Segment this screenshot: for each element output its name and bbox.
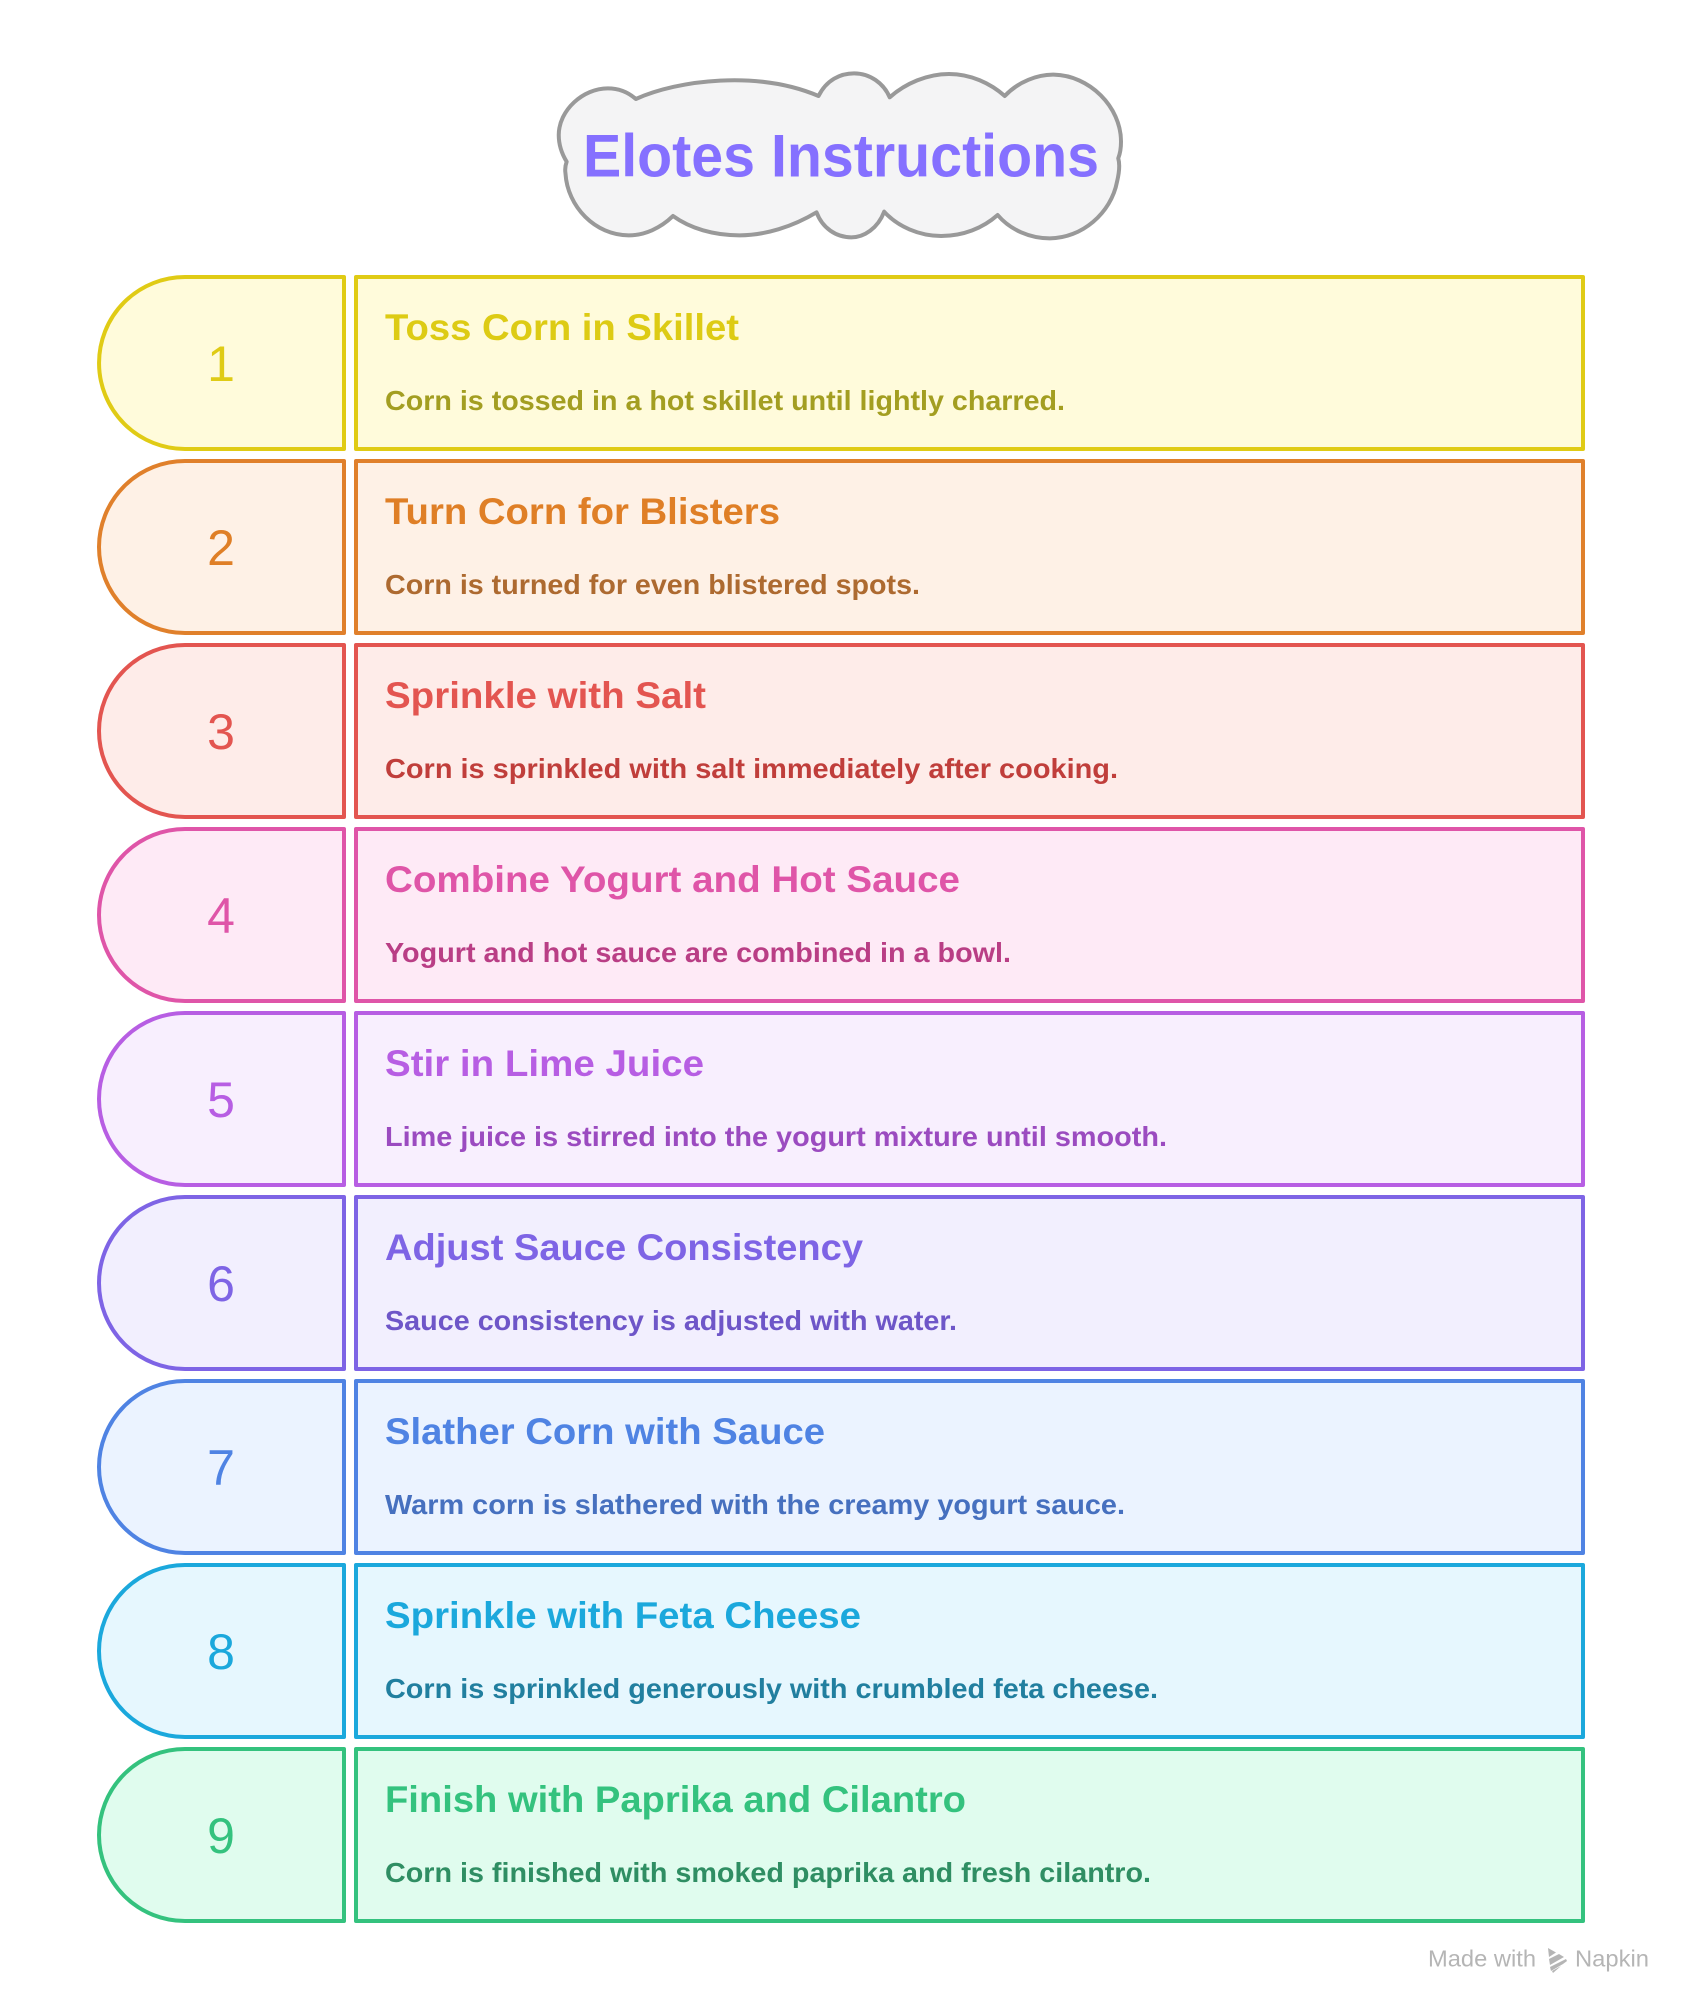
panel: step 7: Slather Corn with Sauce bbox=[385, 1411, 825, 1452]
step 4 bbox=[99, 829, 1583, 1001]
number badge 7: 7 bbox=[207, 1440, 235, 1496]
panel: step 7 bbox=[356, 1381, 1583, 1553]
cloud shape bbox=[559, 73, 1121, 238]
step 8 bbox=[99, 1565, 1583, 1737]
number badge 7 bbox=[99, 1381, 344, 1553]
step 9 bbox=[99, 1749, 1583, 1921]
number badge 9 bbox=[99, 1749, 344, 1921]
number badge 3 bbox=[99, 645, 344, 817]
step 5 bbox=[99, 1013, 1583, 1185]
panel: step 5: Stir in Lime Juice bbox=[385, 1043, 704, 1084]
icon: napkin logo bbox=[1548, 1948, 1567, 1973]
footer attribution: Made with bbox=[1428, 1946, 1536, 1972]
panel: step 8: Corn is sprinkled generously with crumbled feta cheese. bbox=[385, 1673, 1158, 1704]
number badge 1 bbox=[99, 277, 344, 449]
panel: step 2: Turn Corn for Blisters bbox=[385, 491, 780, 532]
number badge 1: 1 bbox=[207, 336, 235, 392]
number badge 2 bbox=[99, 461, 344, 633]
number badge 5 bbox=[99, 1013, 344, 1185]
footer attribution: Napkin bbox=[1575, 1946, 1649, 1972]
panel: step 9: Finish with Paprika and Cilantro bbox=[385, 1779, 966, 1820]
panel: step 1 bbox=[356, 277, 1583, 449]
panel: step 4: Yogurt and hot sauce are combined in a bowl. bbox=[385, 937, 1011, 968]
number badge 5: 5 bbox=[207, 1072, 235, 1128]
panel: step 6: Sauce consistency is adjusted with water. bbox=[385, 1305, 957, 1336]
step 3 bbox=[99, 645, 1583, 817]
panel: step 1: Toss Corn in Skillet bbox=[385, 307, 739, 348]
number badge 8: 8 bbox=[207, 1624, 235, 1680]
panel: step 9 bbox=[356, 1749, 1583, 1921]
panel: step 2: Corn is turned for even blistered spots. bbox=[385, 569, 920, 600]
panel: step 8 bbox=[356, 1565, 1583, 1737]
number badge 8 bbox=[99, 1565, 344, 1737]
step 6 bbox=[99, 1197, 1583, 1369]
panel: step 5: Lime juice is stirred into the yogurt mixture until smooth. bbox=[385, 1121, 1167, 1152]
number badge 9: 9 bbox=[207, 1808, 235, 1864]
panel: step 4 bbox=[356, 829, 1583, 1001]
title: Elotes Instructions bbox=[583, 122, 1099, 190]
step 1 bbox=[99, 277, 1583, 449]
panel: step 6: Adjust Sauce Consistency bbox=[385, 1227, 863, 1268]
panel: step 3: Sprinkle with Salt bbox=[385, 675, 706, 716]
panel: step 7: Warm corn is slathered with the creamy yogurt sauce. bbox=[385, 1489, 1125, 1520]
panel: step 4: Combine Yogurt and Hot Sauce bbox=[385, 859, 960, 900]
panel: step 8: Sprinkle with Feta Cheese bbox=[385, 1595, 861, 1636]
number badge 6: 6 bbox=[207, 1256, 235, 1312]
number badge 6 bbox=[99, 1197, 344, 1369]
panel: step 3 bbox=[356, 645, 1583, 817]
step 7 bbox=[99, 1381, 1583, 1553]
panel: step 3: Corn is sprinkled with salt immediately after cooking. bbox=[385, 753, 1118, 784]
number badge 4 bbox=[99, 829, 344, 1001]
number badge 2: 2 bbox=[207, 520, 235, 576]
panel: step 6 bbox=[356, 1197, 1583, 1369]
panel: step 9: Corn is finished with smoked paprika and fresh cilantro. bbox=[385, 1857, 1151, 1888]
number badge 4: 4 bbox=[207, 888, 235, 944]
step 2 bbox=[99, 461, 1583, 633]
panel: step 2 bbox=[356, 461, 1583, 633]
title cloud bbox=[559, 73, 1121, 238]
number badge 3: 3 bbox=[207, 704, 235, 760]
panel: step 5 bbox=[356, 1013, 1583, 1185]
panel: step 1: Corn is tossed in a hot skillet until lightly charred. bbox=[385, 385, 1065, 416]
footer attribution bbox=[1428, 1946, 1649, 1973]
